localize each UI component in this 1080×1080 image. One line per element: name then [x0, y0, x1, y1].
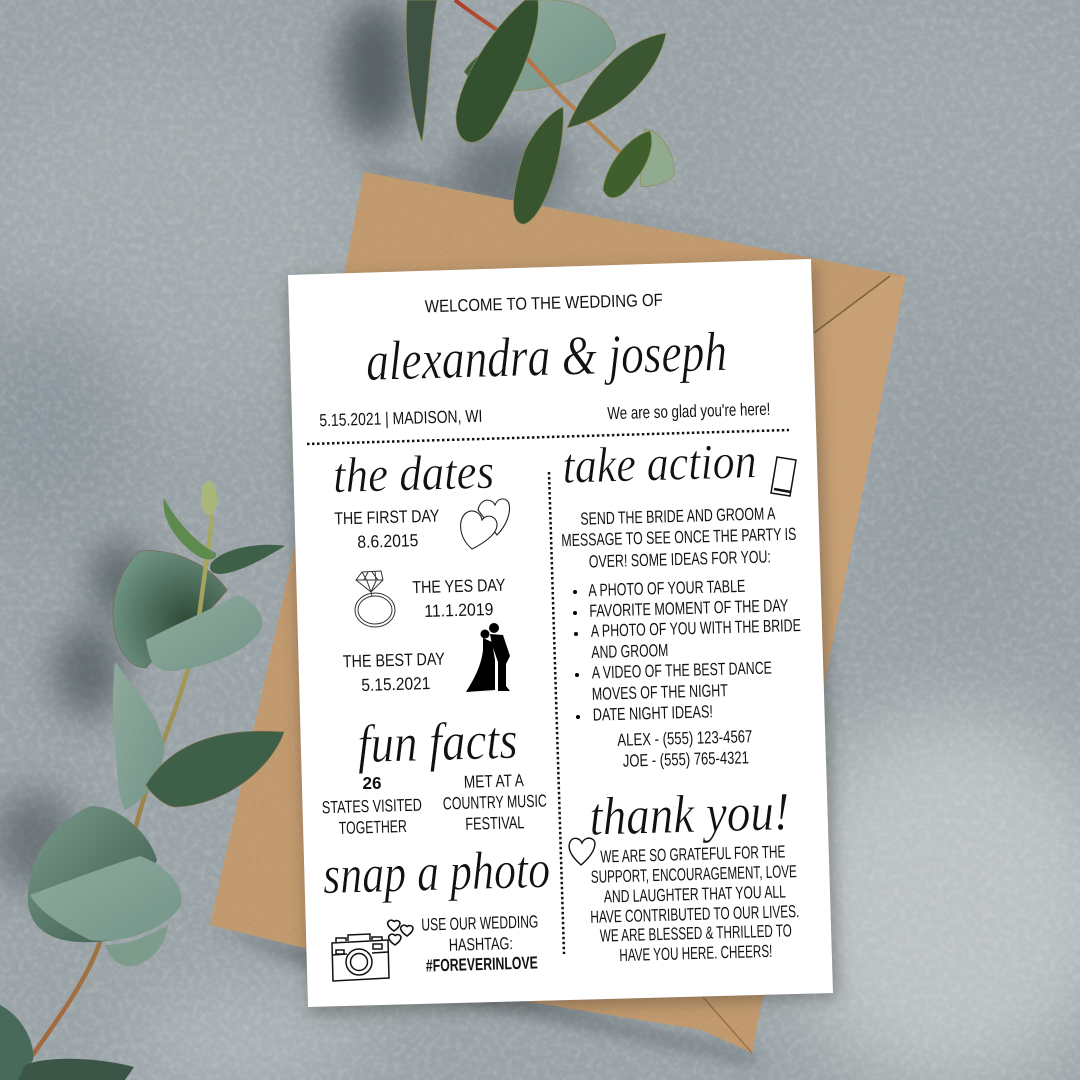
envelope flap fold — [811, 276, 906, 680]
icon: small hearts — [388, 920, 413, 945]
fact: 26 states: TOGETHER — [339, 816, 407, 838]
intro paragraph: OVER! SOME IDEAS FOR YOU: — [589, 546, 771, 572]
section: the dates — [332, 443, 510, 695]
hashtag instructions — [421, 911, 539, 976]
thank you message: WE ARE BLESSED & THRILLED TO — [600, 920, 792, 946]
icon: two hearts — [461, 499, 510, 549]
first day date: 8.6.2015 — [357, 530, 419, 552]
panel: white program card — [288, 259, 833, 1007]
thank you message: AND LAUGHTER THAT YOU ALL — [604, 881, 786, 907]
bullet list of ideas: MOVES OF THE NIGHT — [592, 680, 728, 704]
yes day text: THE YES DAY — [412, 575, 506, 597]
date and location: 5.15.2021 | MADISON, WI — [319, 406, 483, 430]
fact: met at festival: COUNTRY MUSIC — [443, 791, 547, 813]
icon: camera — [332, 934, 389, 981]
header: welcome line: WELCOME TO THE WEDDING OF — [425, 290, 663, 316]
heading: take action: take action — [562, 432, 757, 494]
best day text: THE BEST DAY — [343, 649, 445, 671]
fact: 26 states: STATES VISITED — [322, 795, 422, 817]
section: snap a photo — [322, 839, 551, 981]
thank you message — [590, 841, 800, 965]
contact numbers — [617, 726, 753, 771]
vertical dotted divider — [549, 472, 564, 954]
fact: 26 states — [322, 773, 422, 838]
kraft envelope — [210, 172, 906, 1053]
horizontal dotted divider — [307, 430, 789, 444]
yes day date: 11.1.2019 — [424, 599, 494, 621]
fact: met at festival: MET AT A — [464, 770, 524, 792]
hashtag instructions: USE OUR WEDDING — [421, 911, 539, 935]
thank you message: SUPPORT, ENCOURAGEMENT, LOVE — [591, 861, 797, 887]
intro paragraph: SEND THE BRIDE AND GROOM A — [580, 503, 776, 529]
bullet list of ideas: A PHOTO OF YOU WITH THE BRIDE — [591, 615, 801, 641]
best day date: 5.15.2021 — [361, 673, 431, 695]
icon: heart outline — [569, 838, 595, 865]
fact: met at festival: FESTIVAL — [465, 812, 525, 834]
bullet list of ideas: AND GROOM — [591, 640, 669, 662]
thank you message: HAVE CONTRIBUTED TO OUR LIVES. — [590, 901, 800, 927]
bullet list of ideas: FAVORITE MOMENT OF THE DAY — [589, 595, 789, 621]
heading: thank you: thank you! — [589, 781, 790, 847]
section: thank you — [569, 781, 800, 965]
contact numbers: JOE - (555) 765-4321 — [623, 747, 749, 771]
bullet list of ideas: A PHOTO OF YOUR TABLE — [588, 576, 746, 600]
hashtag instructions: #FOREVERINLOVE — [426, 952, 538, 976]
heading: snap a photo: snap a photo — [322, 839, 551, 905]
first day text: THE FIRST DAY — [334, 506, 440, 528]
bullet list of ideas: A VIDEO OF THE BEST DANCE — [592, 657, 772, 683]
icon: kissing couple silhouette — [466, 623, 510, 692]
heading: the dates: the dates — [332, 443, 495, 503]
fact: 26 states: 26 — [362, 773, 382, 793]
hashtag instructions: HASHTAG: — [449, 933, 513, 955]
title: couple names: alexandra & joseph — [365, 321, 728, 393]
intro paragraph — [561, 503, 797, 572]
thank you message: WE ARE SO GRATEFUL FOR THE — [600, 841, 786, 867]
bullet list of ideas — [573, 576, 801, 725]
icon: diamond ring — [355, 571, 395, 627]
heading: fun facts: fun facts — [357, 710, 518, 774]
icon: phone — [771, 457, 796, 496]
thank you message: HAVE YOU HERE. CHEERS! — [619, 941, 773, 965]
contact numbers: ALEX - (555) 123-4567 — [617, 726, 753, 750]
intro paragraph: MESSAGE TO SEE ONCE THE PARTY IS — [561, 524, 797, 550]
bullet list of ideas: DATE NIGHT IDEAS! — [593, 701, 713, 725]
eucalyptus branch: top — [406, 0, 674, 224]
section: fun facts — [322, 710, 547, 838]
eucalyptus branch: left — [0, 481, 285, 1080]
section: take action — [561, 432, 801, 771]
card shadow — [288, 264, 838, 1014]
fact: met at festival — [443, 770, 547, 834]
greeting: We are so glad you're here! — [607, 399, 771, 423]
